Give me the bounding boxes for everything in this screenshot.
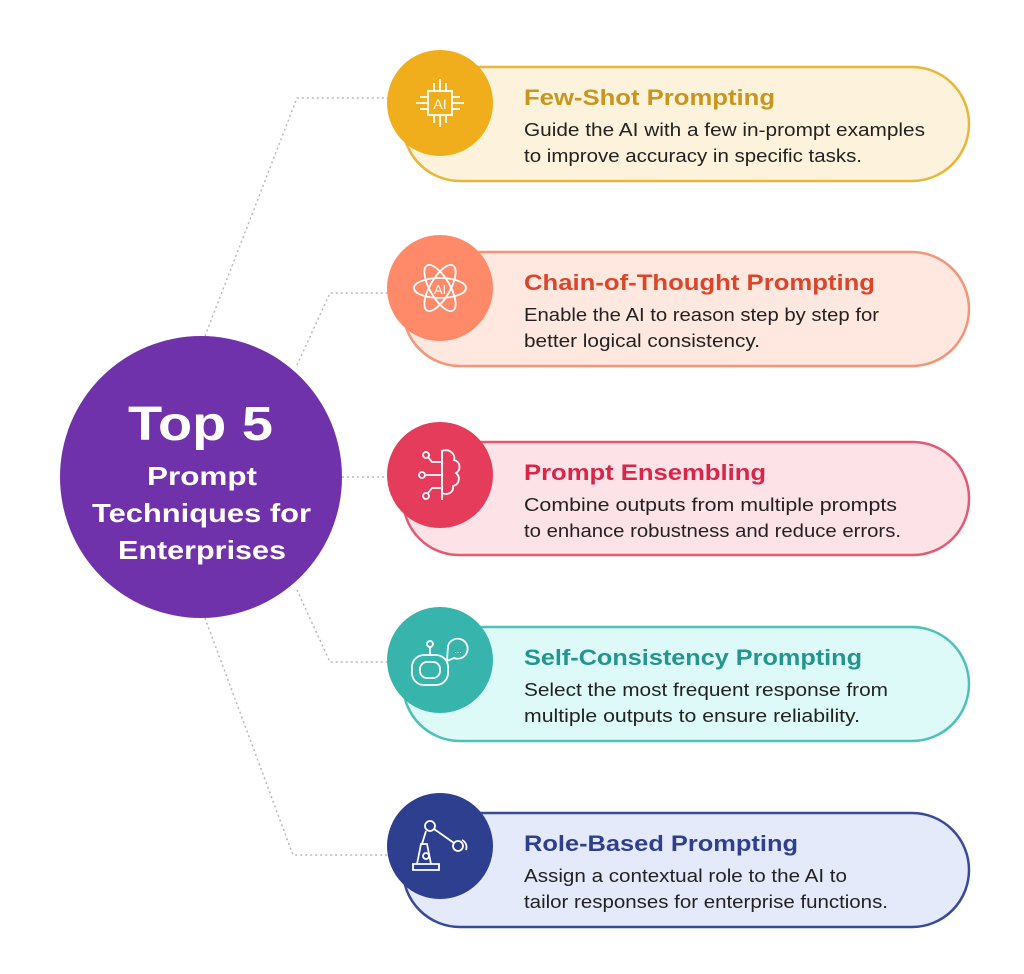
- icon: brain circuit: [387, 422, 493, 528]
- icon: robot arm: [387, 793, 493, 899]
- card 3: Prompt Ensembling: [387, 422, 969, 555]
- central circle: title: Top 5: [128, 398, 273, 451]
- card 2: Chain-of-Thought: Enable the AI to reason step by step for: [524, 305, 879, 325]
- central circle: title: Techniques for: [92, 498, 311, 528]
- icon: robot chat: [387, 607, 493, 713]
- card 5: Role-Based: tailor responses for enterprise functions.: [524, 892, 888, 912]
- card 5: Role-Based: [387, 793, 969, 927]
- connector lines: [205, 98, 388, 855]
- card 1: Few-Shot Prompting: Guide the AI with a few in-prompt examples: [524, 120, 925, 140]
- card 2: Chain-of-Thought: [387, 235, 969, 366]
- icon: atom AI: [387, 235, 493, 341]
- card 2: Chain-of-Thought: better logical consistency.: [524, 331, 760, 351]
- icon: robot chat: ...: [454, 645, 462, 655]
- card 1: Few-Shot Prompting: to improve accuracy in specific tasks.: [524, 146, 862, 166]
- central circle: title: Prompt: [147, 461, 257, 491]
- card 4: Self-Consistency: [387, 607, 969, 741]
- card 1: Few-Shot Prompting: Few-Shot Prompting: [524, 85, 775, 110]
- icon: atom AI: AI: [434, 282, 446, 297]
- card 1: Few-Shot Prompting: [387, 50, 969, 181]
- icon: AI chip: AI: [433, 96, 447, 112]
- card 2: Chain-of-Thought: Chain-of-Thought Prompting: [524, 270, 875, 295]
- card 4: Self-Consistency: Self-Consistency Prompting: [524, 645, 862, 670]
- icon: AI chip: [387, 50, 493, 156]
- card 4: Self-Consistency: multiple outputs to ensure reliability.: [524, 706, 860, 726]
- card 4: Self-Consistency: Select the most frequent response from: [524, 680, 888, 700]
- card 3: Prompt Ensembling: Combine outputs from multiple prompts: [524, 495, 897, 515]
- card 5: Role-Based: Role-Based Prompting: [524, 831, 798, 856]
- central circle: title: [60, 336, 342, 618]
- card 5: Role-Based: Assign a contextual role to the AI to: [524, 866, 847, 886]
- card 3: Prompt Ensembling: to enhance robustness and reduce errors.: [524, 521, 901, 541]
- card 3: Prompt Ensembling: Prompt Ensembling: [524, 460, 766, 485]
- central circle: title: Enterprises: [118, 535, 286, 565]
